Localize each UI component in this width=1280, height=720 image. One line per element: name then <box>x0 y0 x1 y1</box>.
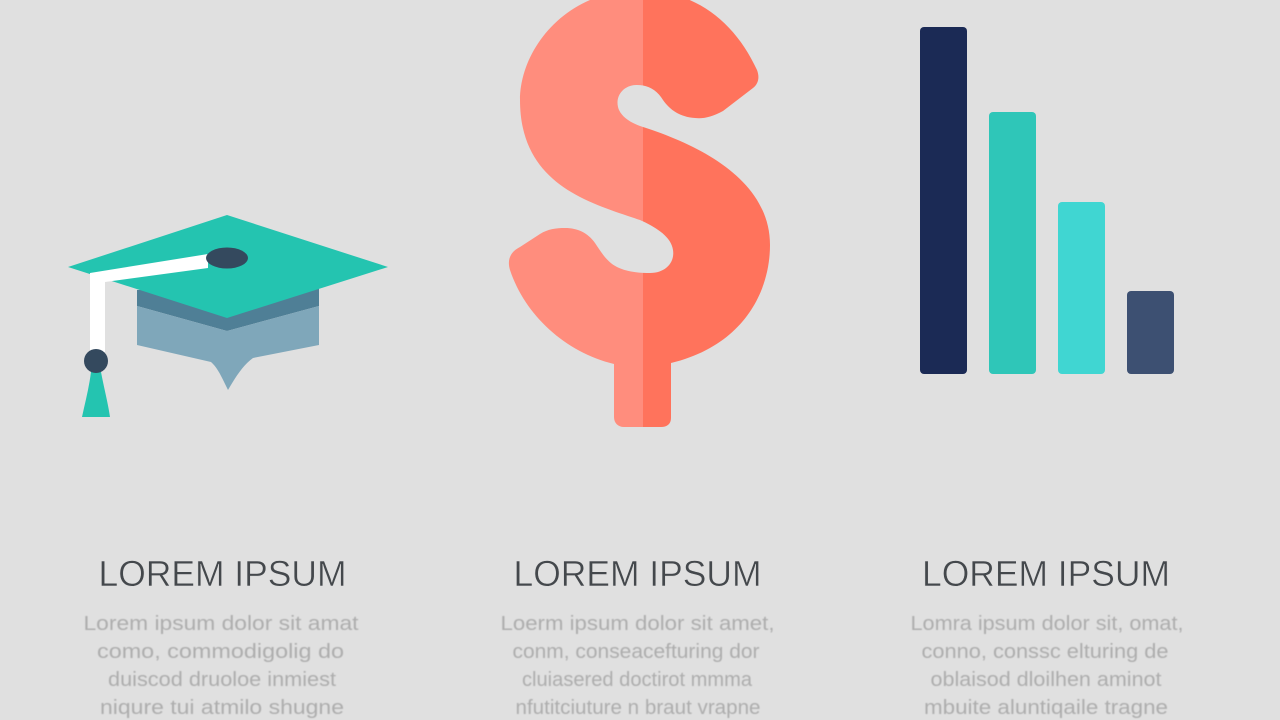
body text: nfutitciuture n braut vrapne <box>516 697 760 719</box>
body text: conm, conseacefturing dor <box>512 641 760 663</box>
cap band shadow <box>137 288 319 331</box>
bar 4 <box>1127 291 1174 374</box>
heading: LOREM IPSUM <box>514 553 762 594</box>
heading: LOREM IPSUM <box>922 553 1170 594</box>
body text: conno, conssc elturing de <box>922 641 1168 663</box>
body text <box>84 613 359 719</box>
column 3 text <box>910 553 1184 719</box>
body text: Lorem ipsum dolor sit amat <box>84 613 359 635</box>
body text: Loerm ipsum dolor sit amet, <box>500 613 774 635</box>
icon: graduation cap <box>68 215 388 417</box>
body text <box>910 613 1184 719</box>
body text: duiscod druoloe inmiest <box>108 669 336 691</box>
column 2 text <box>500 553 774 719</box>
body text: niqure tui atmilo shugne <box>100 697 344 719</box>
body text: mbuite aluntiqaile tragne <box>924 697 1168 719</box>
dollar right half <box>643 0 770 427</box>
body text: Lomra ipsum dolor sit, omat, <box>910 613 1184 635</box>
bar 3 <box>1058 202 1105 374</box>
bar 1 <box>920 27 967 374</box>
body text: cluiasered doctirot mmma <box>522 669 753 691</box>
cap base <box>137 306 319 390</box>
column 1 text <box>84 553 359 719</box>
tassel knot <box>84 349 108 373</box>
mortarboard <box>68 215 388 318</box>
heading: LOREM IPSUM <box>98 553 346 594</box>
icon: dollar sign <box>509 0 770 427</box>
cap button <box>206 248 248 268</box>
tassel strap <box>90 254 208 352</box>
tassel <box>82 372 110 417</box>
body text <box>500 613 774 719</box>
body text: como, commodigolig do <box>97 641 344 663</box>
bar 2 <box>989 112 1036 374</box>
bar chart <box>920 27 1174 374</box>
body text: oblaisod dloilhen aminot <box>930 669 1162 691</box>
dollar left half <box>508 0 643 427</box>
